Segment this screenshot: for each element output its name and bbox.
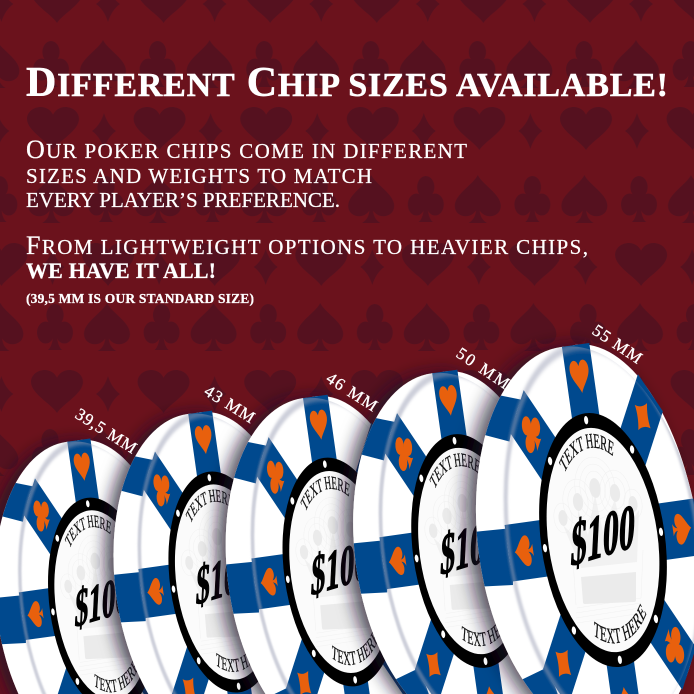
text block: intro paragraph: OUR POKER CHIPS COME IN DIFFERENT <box>26 135 467 164</box>
chip 50 mm edge text: TEXT HERE <box>429 453 480 488</box>
chip 55 mm edge text: TEXT HERE <box>559 434 614 472</box>
text block: range paragraph <box>26 231 588 283</box>
size label: 39,5 mm: 39,5 MM <box>72 404 140 457</box>
chip 55 mm edge text <box>559 434 646 644</box>
text block: range paragraph: FROM LIGHTWEIGHT OPTIONS TO HEAVIER CHIPS, <box>26 231 588 260</box>
chip: 39,5 mm <box>0 432 148 694</box>
chip 55 mm value: $100 <box>569 490 637 581</box>
text block: intro paragraph: EVERY PLAYER’S PREFERENCE. <box>26 188 340 212</box>
chip 46 mm value: $100 <box>310 527 370 608</box>
size label: 46 mm: 46 MM <box>323 368 381 415</box>
chip 50 mm value: $100 <box>439 506 501 589</box>
chip 43 mm value: $100 <box>195 538 253 617</box>
chip 39,5 mm edge text: TEXT HERE <box>64 515 111 548</box>
chip 39,5 mm value: $100 <box>73 564 130 639</box>
chip 43 mm edge text <box>186 490 250 672</box>
size label: 43 mm: 43 MM <box>201 381 258 427</box>
chip: 46 mm <box>204 388 406 694</box>
text block: standard size note: (39,5 MM IS OUR STANDARD SIZE) <box>26 291 254 306</box>
size label: 55 mm: 55 MM <box>589 321 646 368</box>
chip 43 mm edge text: TEXT HERE <box>216 653 250 672</box>
chip 55 mm edge text: TEXT HERE <box>594 604 646 644</box>
title: DIFFERENT CHIP SIZES AVAILABLE! <box>26 60 668 106</box>
chip 43 mm edge text: TEXT HERE <box>186 490 230 522</box>
chip 46 mm edge text: TEXT HERE <box>332 632 377 666</box>
chip: 50 mm <box>331 362 533 694</box>
chip 46 mm edge text <box>300 476 377 666</box>
size label: 50 mm: 50 MM <box>453 344 513 393</box>
chip: 55 mm <box>452 335 694 694</box>
chip 46 mm edge text: TEXT HERE <box>300 476 350 510</box>
chip 50 mm edge text <box>429 453 500 646</box>
text block: range paragraph: WE HAVE IT ALL! <box>26 258 216 283</box>
chip: 43 mm <box>92 404 266 694</box>
chip 39,5 mm edge text <box>64 515 137 693</box>
text block: intro paragraph <box>26 135 467 212</box>
chip 50 mm edge text: TEXT HERE <box>462 624 500 646</box>
text block: intro paragraph: SIZES AND WEIGHTS TO MATCH <box>26 164 372 188</box>
